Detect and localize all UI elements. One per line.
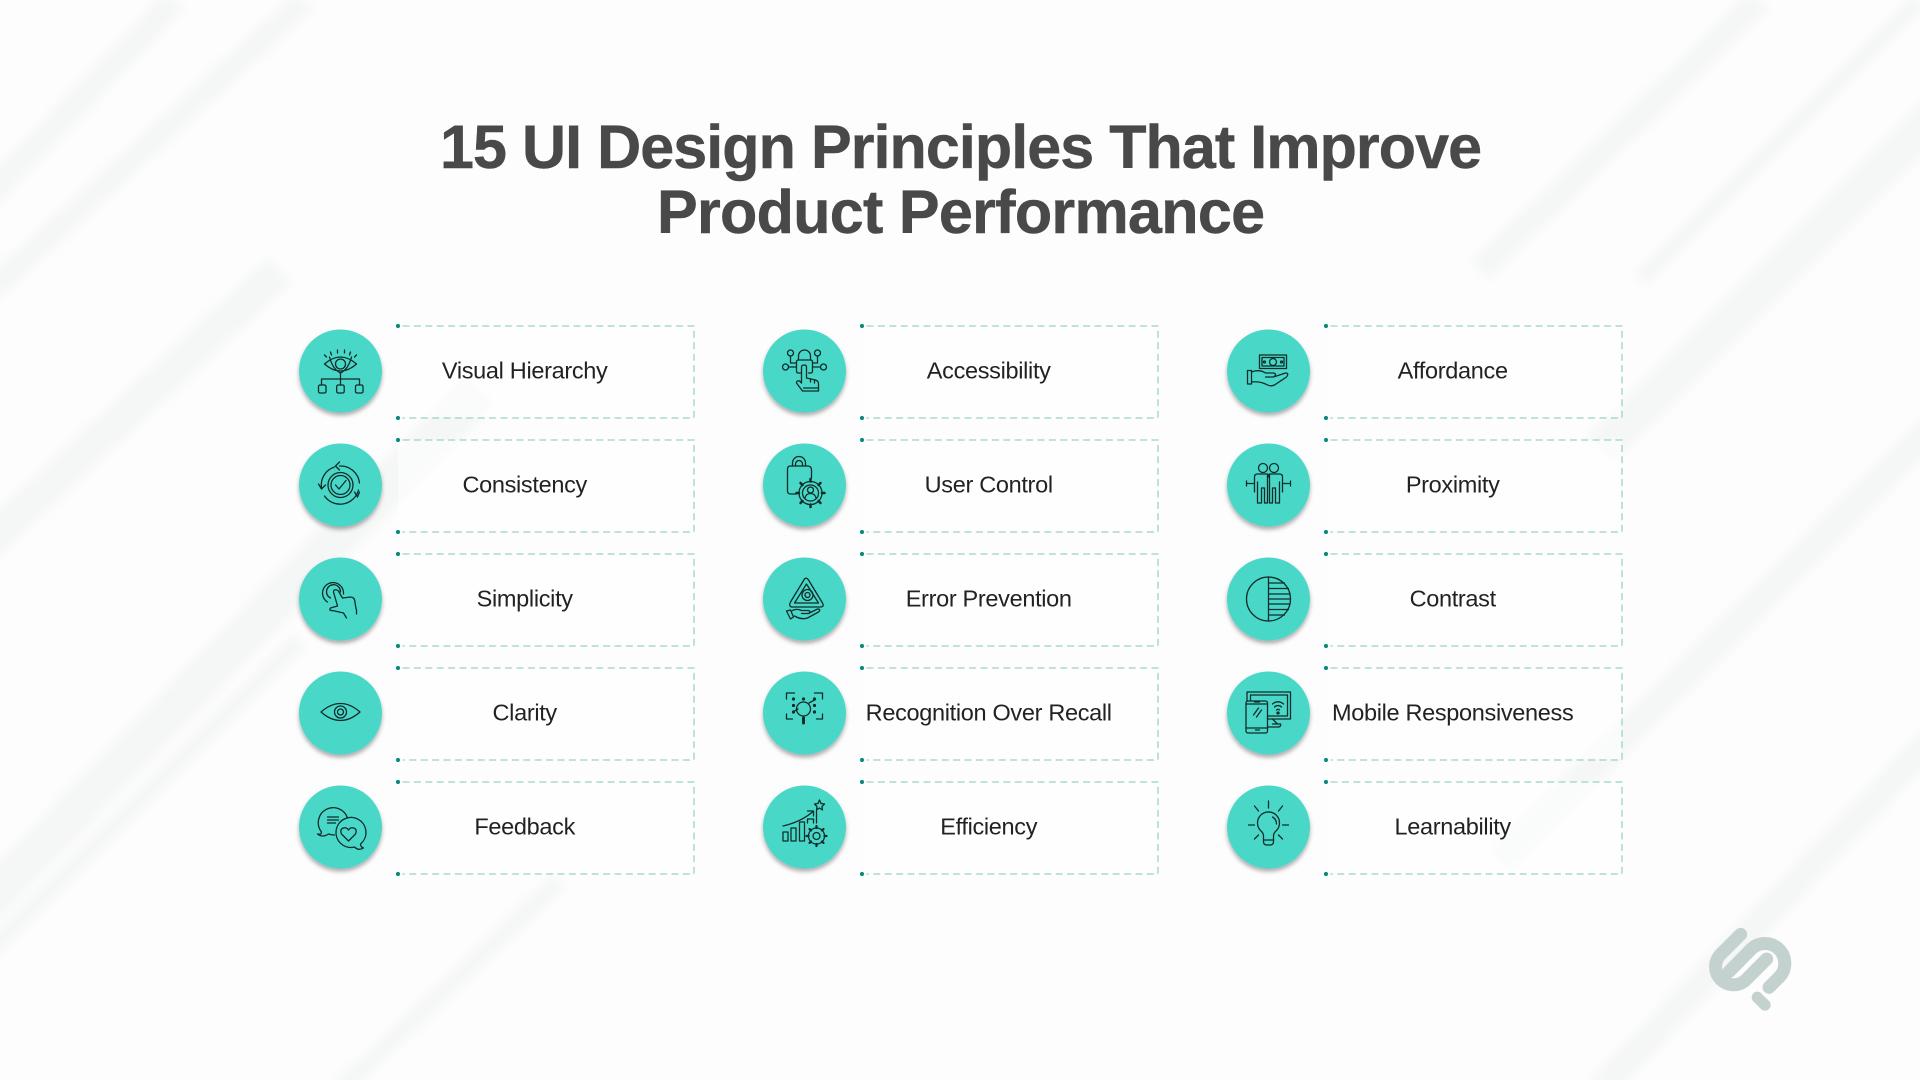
item: Proximity [1227, 438, 1622, 534]
icon: growth chart with gear and star [783, 800, 826, 846]
item: User Control [763, 438, 1158, 534]
title [440, 113, 1482, 246]
item: Accessibility: Accessibility [927, 358, 1051, 384]
item: Consistency [299, 438, 694, 534]
item: Visual Hierarchy: Visual Hierarchy [442, 358, 608, 384]
icon: banknote over hand [1248, 355, 1288, 386]
item: Contrast [1227, 552, 1622, 648]
icon: light bulb [1248, 801, 1288, 845]
icon: lock network with hand [782, 350, 826, 391]
item: Feedback [299, 780, 694, 876]
logo [1716, 934, 1785, 1005]
icon: eye over hierarchy [318, 350, 363, 393]
item: Error Prevention [763, 552, 1158, 648]
item: Mobile Responsiveness [1227, 666, 1622, 762]
item: Efficiency: Efficiency [940, 814, 1038, 840]
title: Product Performance [657, 178, 1265, 246]
item: Contrast: Contrast [1410, 586, 1497, 612]
item: Consistency: Consistency [462, 472, 588, 498]
item: Learnability: Learnability [1395, 814, 1511, 840]
icon: warning triangle with hand [786, 578, 823, 619]
item: Mobile Responsiveness: Mobile Responsiveness [1332, 700, 1573, 726]
item: Recognition Over Recall: Recognition Over Recall [866, 700, 1112, 726]
icon: touch gesture [323, 583, 356, 618]
item: Simplicity: Simplicity [477, 586, 573, 612]
item: Efficiency [763, 780, 1158, 876]
item: Clarity: Clarity [493, 700, 557, 726]
icon: half striped circle [1246, 577, 1290, 621]
item: Recognition Over Recall [763, 666, 1158, 762]
icon: two people side by side [1246, 464, 1290, 503]
item: User Control: User Control [925, 472, 1053, 498]
item: Proximity: Proximity [1406, 472, 1500, 498]
item: Affordance [1227, 324, 1622, 420]
item: Feedback: Feedback [474, 814, 576, 840]
icon: circular check [318, 462, 360, 504]
item: Visual Hierarchy [299, 324, 694, 420]
icon: chat bubbles with heart [318, 808, 366, 849]
item: Affordance: Affordance [1398, 358, 1508, 384]
icon: eye [321, 704, 360, 720]
item: Simplicity [299, 552, 694, 648]
icon: pattern recognition magnifier [786, 693, 822, 723]
icon: phone and monitor with wifi [1246, 692, 1290, 733]
item: Learnability [1227, 780, 1622, 876]
title: 15 UI Design Principles That Improve [440, 113, 1482, 181]
icon: lock and user gear [788, 456, 824, 507]
item: Accessibility [763, 324, 1158, 420]
item: Error Prevention: Error Prevention [906, 586, 1072, 612]
item: Clarity [299, 666, 694, 762]
